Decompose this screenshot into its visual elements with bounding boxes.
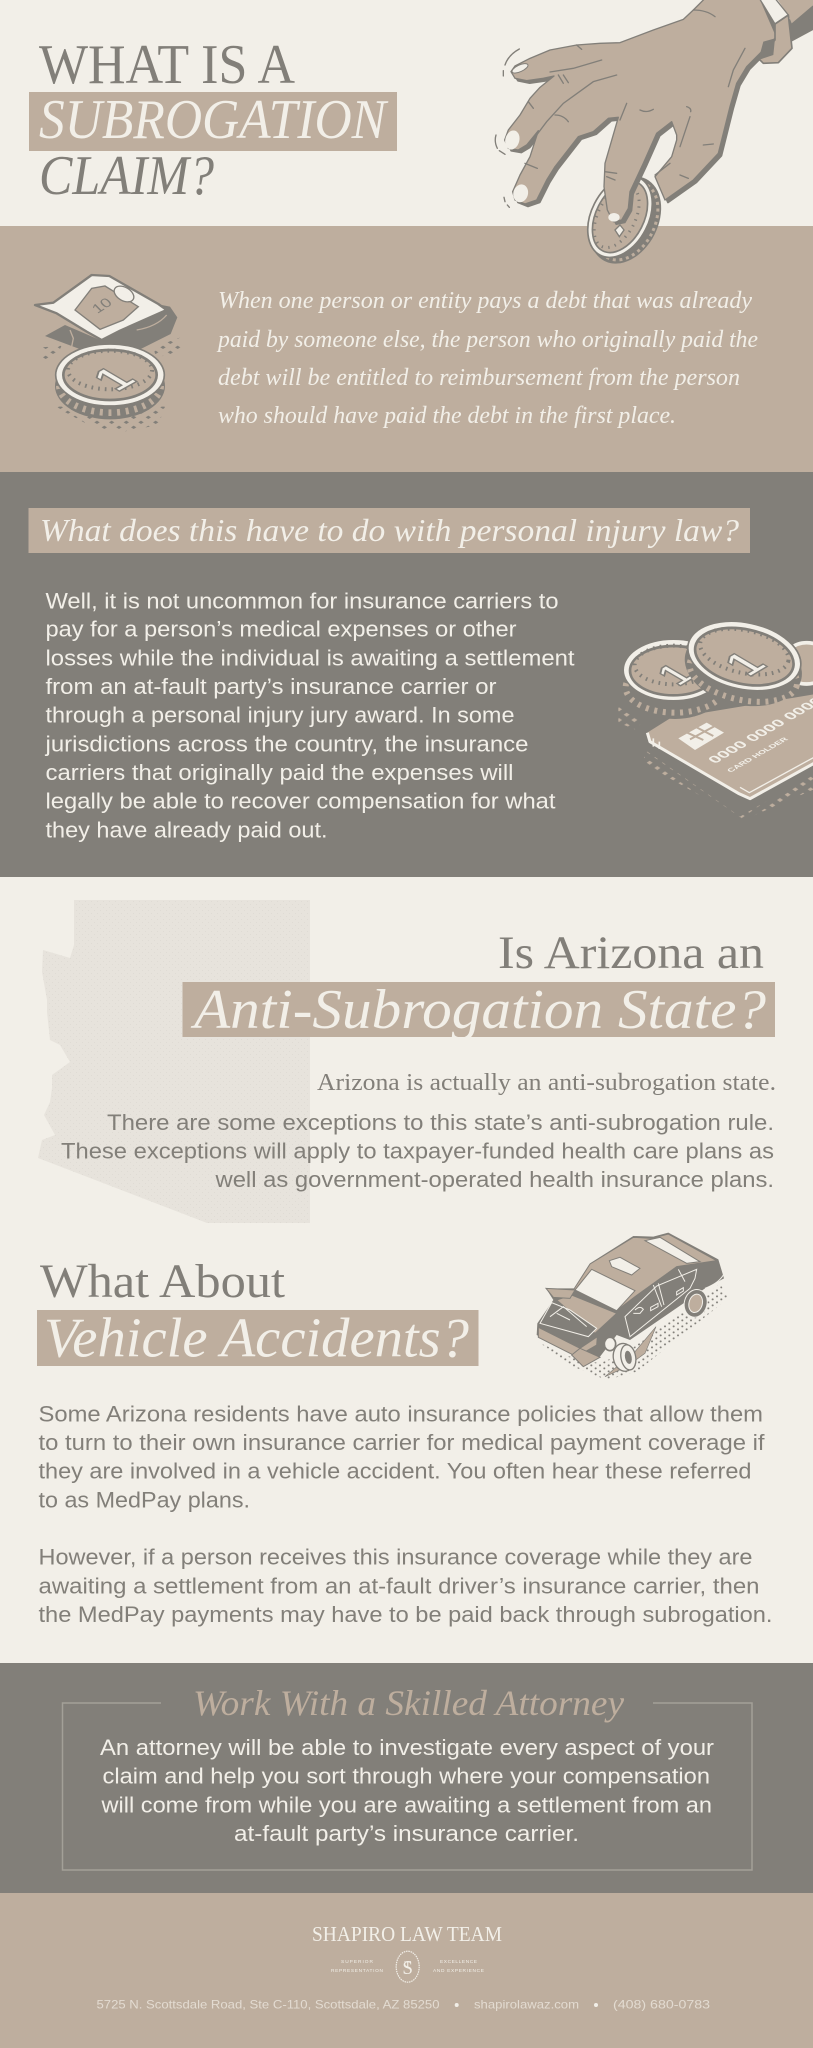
text block: personal injury explanation: [44, 588, 575, 842]
logo: seal and taglines: REPRESENTATION: [331, 1968, 384, 1974]
contact line: (408) 680-0783: [613, 1998, 710, 2012]
panel: work with a skilled attorney: [0, 1663, 813, 1893]
icon: dollar bill and coin: 10: [89, 295, 116, 317]
heading: what about vehicle accidents: [37, 1255, 478, 1370]
heading: what about vehicle accidents: What About: [40, 1255, 286, 1308]
text block: intro definition: [216, 288, 758, 429]
heading: work with a skilled attorney: Work With a Skilled Attorney: [193, 1683, 624, 1723]
heading: is arizona an anti-subrogation state: Is Arizona an: [498, 927, 764, 979]
text block: personal injury explanation: Well, it is not uncommon for insurance carriers to: [46, 588, 558, 613]
panel: intro definition band: [0, 226, 813, 472]
text block: medpay explanation: However, if a person receives this insurance coverage while they are: [38, 1545, 752, 1570]
text block: medpay explanation: to turn to their own insurance carrier for medical payment coverage if: [38, 1430, 765, 1455]
panel: footer: [0, 1893, 813, 2048]
text block: exceptions: well as government-operated health insurance plans.: [214, 1167, 774, 1192]
title: what is a subrogation claim: CLAIM?: [39, 145, 214, 207]
text block: personal injury explanation: losses while the individual is awaiting a settlement: [46, 645, 574, 670]
text block: exceptions: [61, 1110, 774, 1192]
text block: intro definition: paid by someone else, the person who originally paid the: [216, 327, 758, 353]
logo: seal and taglines: AND EXPERIENCE: [433, 1968, 484, 1974]
text block: medpay explanation: awaiting a settlement from an at-fault driver’s insurance carrier, then: [38, 1573, 760, 1598]
map: arizona silhouette: [38, 900, 310, 1223]
heading: what does this have to do with personal injury law: What does this have to do with personal injury law?: [40, 512, 739, 548]
title: what is a subrogation claim: SUBROGATION: [39, 89, 388, 151]
text block: exceptions: There are some exceptions to this state’s anti-subrogation rule.: [107, 1110, 774, 1135]
text block: medpay explanation: they are involved in a vehicle accident. You often hear these referred: [38, 1459, 752, 1484]
text block: medpay explanation: Some Arizona residents have auto insurance policies that allow them: [38, 1402, 763, 1427]
text block: personal injury explanation: they have already paid out.: [46, 817, 328, 842]
heading: is arizona an anti-subrogation state: [182, 927, 775, 1041]
text block: personal injury explanation: jurisdictions across the country, the insurance: [44, 731, 529, 756]
icon: coins and credit card: 1: [714, 645, 777, 683]
contact line: [96, 1998, 710, 2012]
logo: seal and taglines: S: [402, 1958, 413, 1979]
panel: personal injury law: [0, 472, 813, 877]
logo: shapiro law team wordmark: SHAPIRO LAW TEAM: [312, 1922, 502, 1946]
text block: attorney explanation: at-fault party’s insurance carrier.: [234, 1821, 579, 1846]
text block: personal injury explanation: legally be able to recover compensation for what: [46, 789, 556, 814]
text block: arizona anti-subrogation lead: Arizona is actually an anti-subrogation state.: [317, 1070, 776, 1096]
contact line: shapirolawaz.com: [474, 1998, 579, 2012]
heading: is arizona an anti-subrogation state: Anti-Subrogation State?: [190, 979, 766, 1041]
text block: personal injury explanation: carriers that originally paid the expenses will: [46, 760, 514, 785]
text block: attorney explanation: [100, 1735, 714, 1846]
illustration: crashed car: [537, 1233, 728, 1380]
icon: coins and credit card: 1: [648, 658, 704, 692]
text block: intro definition: who should have paid the debt in the first place.: [218, 403, 676, 429]
text block: attorney explanation: will come from while you are awaiting a settlement from an: [100, 1792, 712, 1817]
title: what is a subrogation claim: [29, 34, 397, 207]
text block: intro definition: debt will be entitled to reimbursement from the person: [218, 365, 740, 391]
icon: dollar bill and coin: 1: [82, 360, 147, 398]
logo: seal and taglines: T: [404, 1959, 411, 1971]
icon: coins and credit card: CARD HOLDER: [725, 736, 790, 774]
text block: attorney explanation: claim and help you sort through where your compensation: [102, 1764, 710, 1789]
text block: exceptions: These exceptions will apply to taxpayer-funded health care plans as: [61, 1139, 774, 1164]
text block: attorney explanation: An attorney will be able to investigate every aspect of your: [100, 1735, 714, 1760]
text block: intro definition: When one person or entity pays a debt that was already: [218, 288, 752, 314]
logo: seal and taglines: EXCELLENCE: [440, 1959, 477, 1965]
contact line: 5725 N. Scottsdale Road, Ste C-110, Scottsdale, AZ 85250: [96, 1998, 440, 2012]
logo: seal and taglines: [331, 1951, 484, 1982]
heading: what about vehicle accidents: Vehicle Accidents?: [44, 1308, 469, 1370]
logo: seal and taglines: SUPERIOR: [341, 1959, 374, 1965]
icon: coins and credit card: [618, 611, 813, 820]
text block: medpay explanation: the MedPay payments may have to be paid back through subrogation.: [38, 1602, 773, 1627]
text block: personal injury explanation: pay for a person’s medical expenses or other: [46, 617, 516, 642]
title: what is a subrogation claim: WHAT IS A: [39, 34, 296, 96]
text block: personal injury explanation: through a personal injury jury award. In some: [46, 703, 514, 728]
icon: dollar bill and coin: [35, 275, 181, 432]
text block: personal injury explanation: from an at-fault party’s insurance carrier or: [46, 674, 497, 699]
illustration: hand holding coin: [495, 0, 813, 276]
text block: medpay explanation: to as MedPay plans.: [38, 1487, 250, 1512]
text block: medpay explanation: [38, 1402, 773, 1627]
